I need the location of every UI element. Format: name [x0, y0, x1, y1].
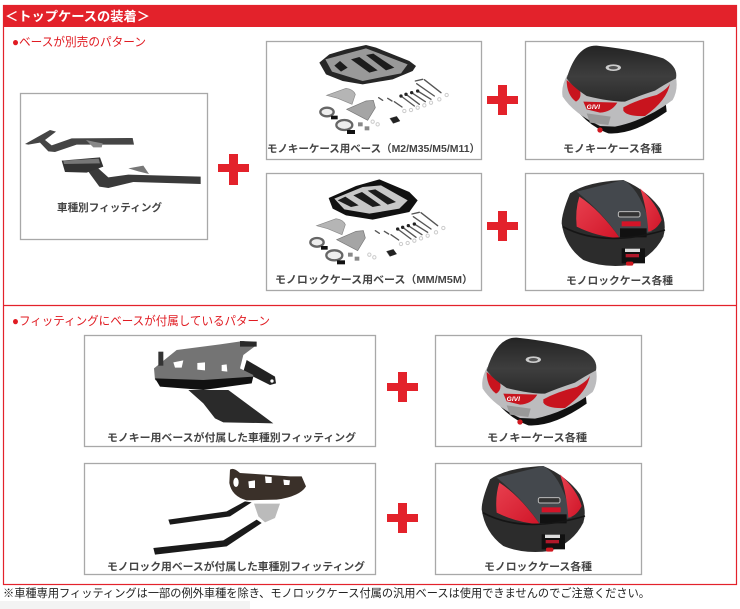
panel: fitting with monolock base: [84, 464, 376, 574]
icon: monokey base plate and hardware: [319, 45, 448, 134]
icon: plus 5: [387, 503, 418, 533]
bottom tint: [0, 601, 250, 609]
icon: monolock case: [482, 466, 585, 552]
icon: plus 4: [387, 372, 418, 402]
panel: monokey case 2: [436, 336, 642, 446]
heading: base sold separately: ●ベースが別売のパターン: [12, 34, 146, 49]
icon: fitting with monolock base: [153, 469, 306, 555]
panel: fitting with monokey base: [84, 336, 376, 446]
icon: monokey case: [482, 338, 597, 425]
icon: plus 2: [487, 85, 518, 115]
panel: monolock case 2: [436, 464, 642, 574]
title bar: ＜トップケースの装着＞: [5, 9, 150, 24]
label: モノロックケース各種: [566, 274, 674, 287]
panel: monolock case: [526, 174, 704, 290]
footnote: ※車種専用フィッティングは一部の例外車種を除き、モノロックケース付属の汎用ベースは使用できませんのでご注意ください。: [3, 586, 650, 600]
panel: monokey case: [526, 42, 704, 160]
label: モノキーケース各種: [563, 142, 663, 155]
icon: monolock base plate and hardware: [310, 179, 445, 264]
label: モノロックケース各種: [484, 560, 593, 573]
title bar: [3, 5, 737, 27]
panel: vehicle-specific fitting: [20, 94, 208, 240]
icon: fitting rails: [25, 130, 201, 188]
panel: monolock base: [266, 174, 482, 290]
label: モノキーケース各種: [487, 431, 588, 444]
label: モノキー用ベースが付属した車種別フィッティング: [107, 431, 357, 444]
icon: monokey case: [562, 46, 677, 133]
icon: plus 3: [487, 211, 518, 241]
icon: fitting with monokey base: [154, 341, 276, 423]
icon: plus 1: [218, 154, 249, 185]
label: モノキーケース用ベース（M2/M35/M5/M11）: [267, 142, 480, 155]
label: モノロック用ベースが付属した車種別フィッティング: [107, 560, 366, 573]
icon: monolock case: [562, 180, 665, 266]
label: モノロックケース用ベース（MM/M5M）: [275, 273, 473, 286]
label: 車種別フィッティング: [57, 201, 162, 214]
panel: monokey base: [266, 42, 482, 160]
section divider: [4, 304, 736, 306]
heading: base included with fitting: ●フィッティングにベースが付属しているパターン: [12, 313, 270, 328]
